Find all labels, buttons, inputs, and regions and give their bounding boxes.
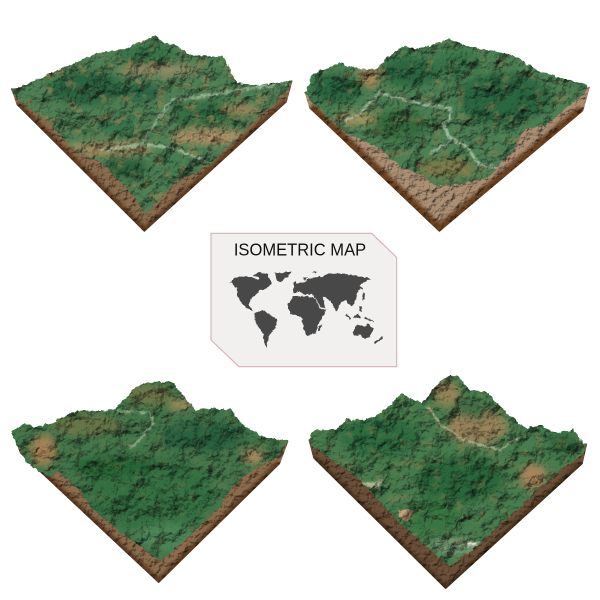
soil sides (308, 440, 588, 590)
terrain block: bottom right (308, 375, 588, 590)
soil sides (12, 430, 288, 584)
soil sides (305, 86, 590, 232)
world map (229, 272, 383, 347)
terrain surface (309, 375, 588, 566)
card background (211, 233, 397, 367)
map card (211, 233, 397, 367)
terrain surface (304, 38, 588, 187)
terrain block: top left (11, 36, 292, 232)
soil sides (12, 80, 292, 232)
terrain block: top right (304, 38, 590, 232)
terrain block: bottom left (12, 381, 288, 584)
terrain surface (11, 36, 292, 214)
title: ISOMETRIC MAP (234, 240, 366, 260)
terrain surface (12, 381, 288, 560)
